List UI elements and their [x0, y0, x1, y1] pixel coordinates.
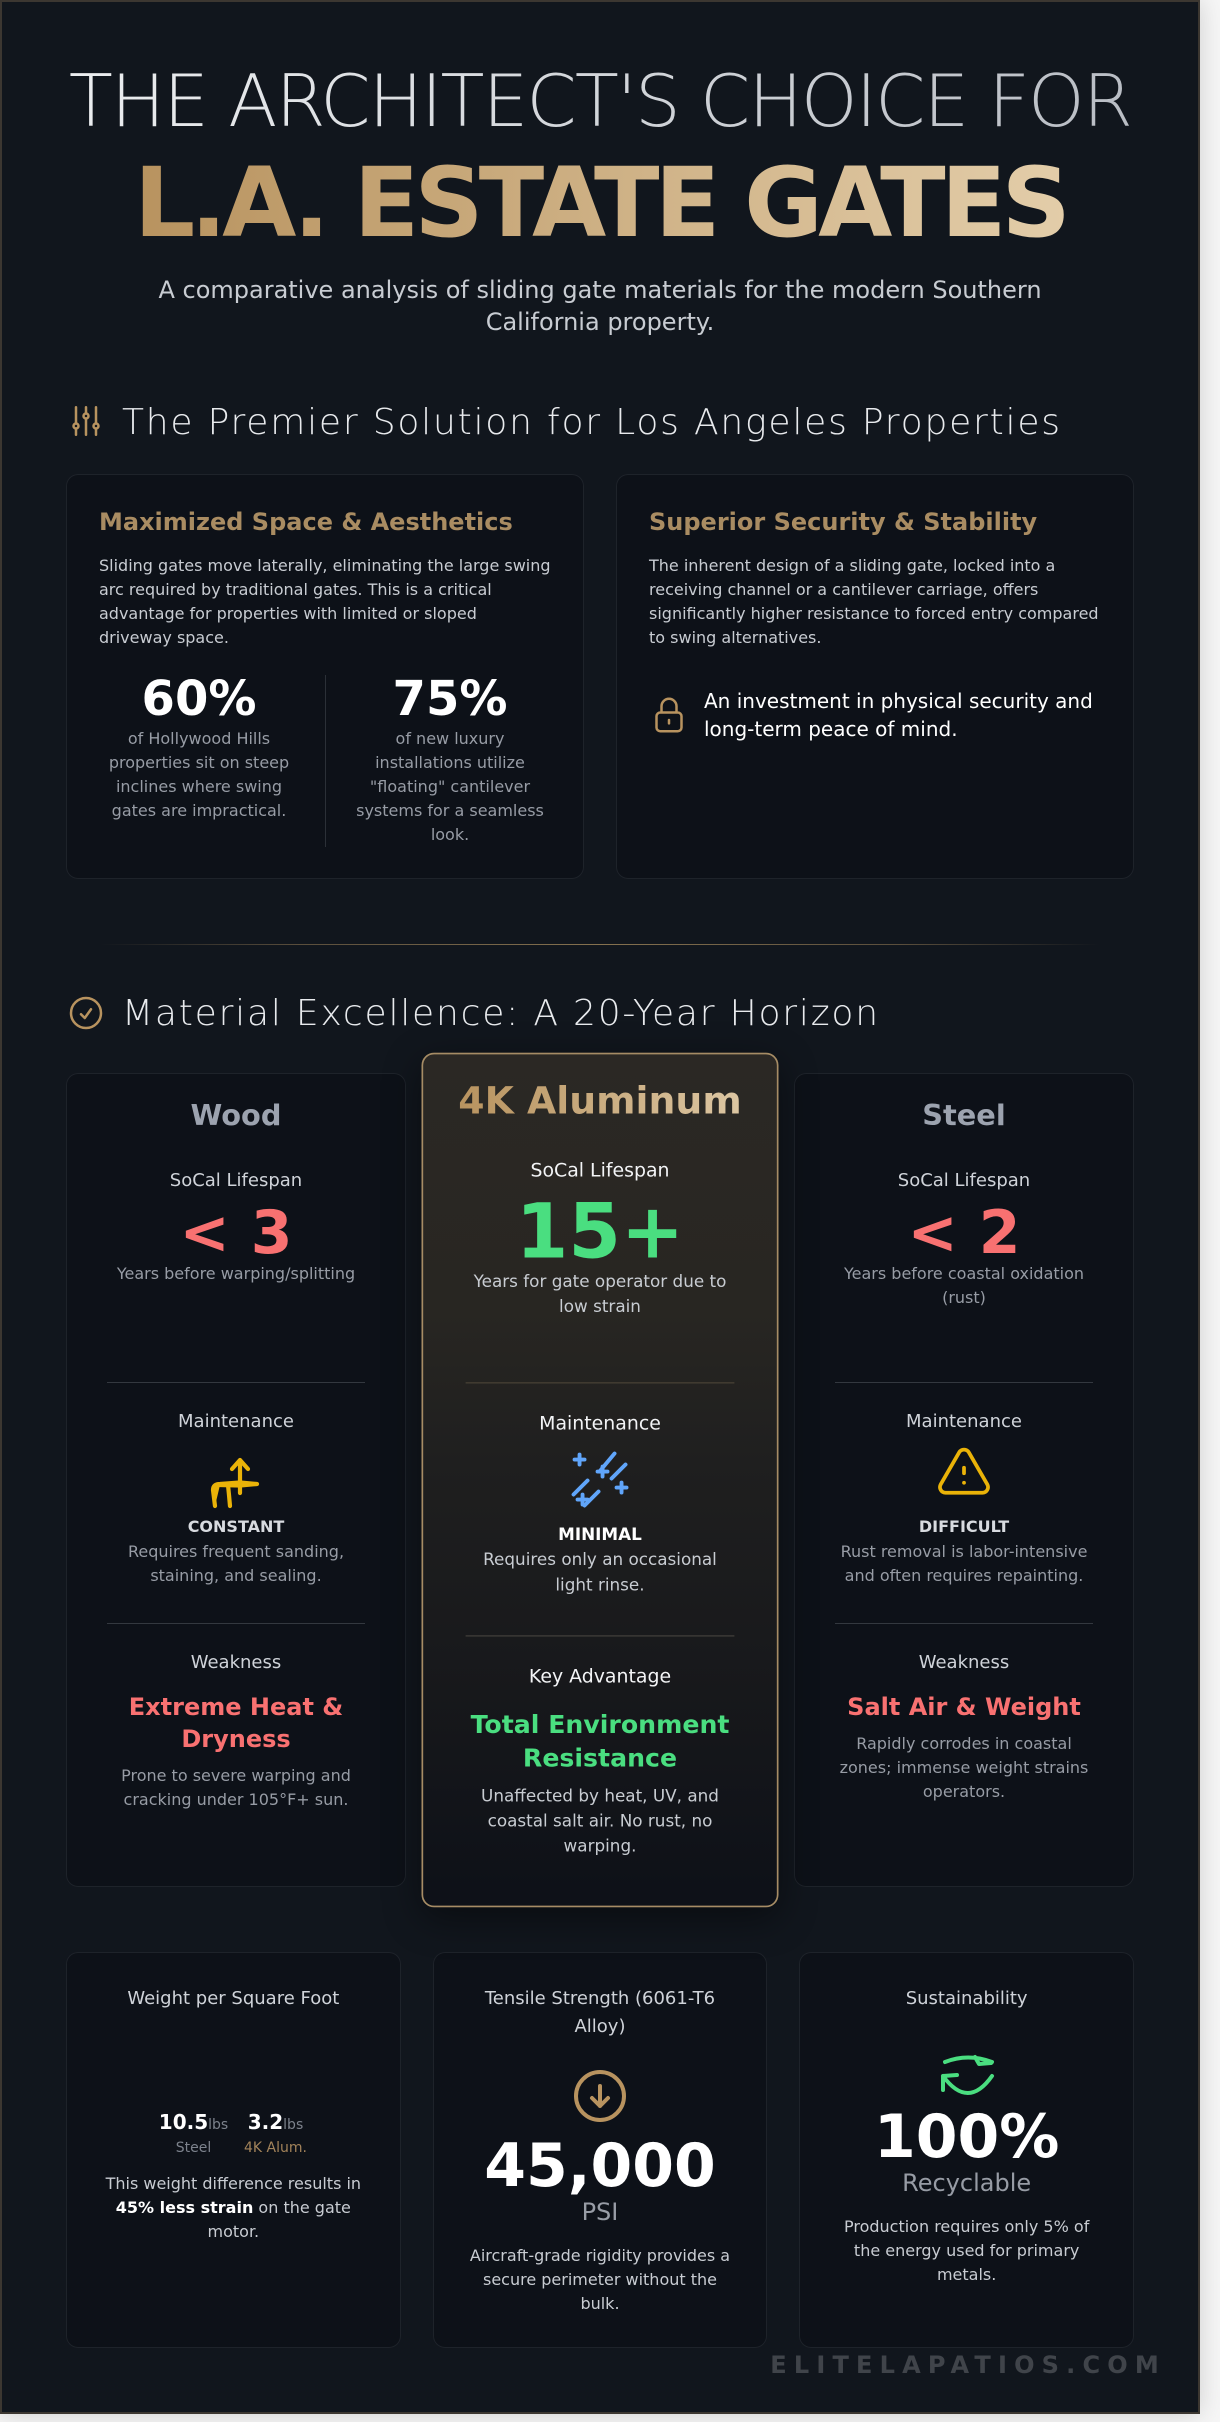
key advantage title	[470, 1710, 729, 1773]
subtitle	[158, 276, 1042, 336]
icon: arrow down circle	[574, 2070, 626, 2122]
metric note: motor.	[208, 2222, 259, 2241]
lifespan value: 15+	[516, 1187, 684, 1275]
card body text: driveway space.	[99, 628, 229, 647]
stat: 60%: 60%	[142, 670, 256, 726]
weakness title: Extreme Heat &	[129, 1693, 343, 1721]
weakness title	[129, 1693, 343, 1753]
material name: 4K Aluminum	[458, 1079, 742, 1122]
title: header line: THE ARCHITECT'S CHOICE FOR	[69, 59, 1131, 143]
weakness label: Weakness	[191, 1652, 281, 1673]
stat: 60%: of Hollywood Hills	[128, 728, 270, 748]
maintenance note	[128, 1542, 344, 1585]
icon: sparkle rinse	[572, 1452, 628, 1508]
card body text: advantage for properties with limited or sloped	[99, 604, 477, 623]
lifespan label: SoCal Lifespan	[170, 1170, 302, 1191]
comparison: steel: Steel	[176, 2140, 211, 2156]
heading: material excellence: Material Excellence: A 20-Year Horizon	[122, 992, 880, 1034]
maintenance status: DIFFICULT	[919, 1516, 1009, 1536]
maintenance note: Requires only an occasional	[483, 1549, 717, 1569]
weakness note	[121, 1766, 351, 1809]
metric label: Tensile Strength (6061-T6	[485, 1988, 715, 2008]
metric label	[484, 1988, 715, 2036]
callout: investment: long-term peace of mind.	[704, 716, 958, 740]
lifespan note: Years before warping/splitting	[117, 1264, 355, 1283]
metric label: Alloy)	[574, 2016, 625, 2036]
card body text	[648, 556, 1099, 647]
key advantage note: warping.	[564, 1836, 636, 1856]
panel: tensile strength	[433, 1952, 767, 2348]
panel: wood	[66, 1073, 406, 1887]
metric label: Sustainability	[906, 1988, 1028, 2008]
metric value: 45,000	[484, 2131, 716, 2201]
lifespan label: SoCal Lifespan	[530, 1160, 670, 1182]
card heading: Maximized Space & Aesthetics	[99, 508, 513, 536]
icon: sliders	[72, 406, 100, 436]
stat: 60%: gates are impractical.	[112, 800, 286, 820]
icon: warning triangle	[938, 1448, 990, 1495]
panel: sustainability	[799, 1952, 1134, 2348]
maintenance note: and often requires repainting.	[845, 1566, 1083, 1585]
watermark: ELITELAPATIOS.COM	[770, 2350, 1166, 2378]
material name: Wood	[191, 1098, 281, 1132]
metric note	[844, 2217, 1090, 2284]
icon: recycle	[940, 2054, 994, 2095]
lifespan note: low strain	[559, 1296, 641, 1316]
lifespan value: < 3	[180, 1198, 292, 1268]
stat: 75%: installations utilize	[375, 752, 525, 772]
key advantage note: Unaffected by heat, UV, and	[481, 1786, 719, 1806]
panel: 4K aluminum (featured)	[422, 1053, 778, 1907]
metric note: Production requires only 5% of	[844, 2217, 1089, 2236]
comparison: aluminum	[244, 2110, 307, 2156]
stat: 60%	[109, 670, 289, 820]
weakness label: Weakness	[919, 1652, 1009, 1673]
metric note: bulk.	[580, 2294, 620, 2313]
weakness note: Prone to severe warping and	[121, 1766, 351, 1785]
lifespan note: Years before coastal oxidation	[844, 1264, 1084, 1283]
lifespan note: (rust)	[942, 1288, 986, 1307]
weakness note: Rapidly corrodes in coastal	[856, 1734, 1072, 1752]
heading: premier solution: The Premier Solution for Los Angeles Properties	[122, 402, 1062, 442]
card body text: Sliding gates move laterally, eliminating the large swing	[99, 556, 551, 575]
metric note: 45% less strain on the gate	[116, 2198, 351, 2217]
comparison: steel: 10.5lbs	[159, 2110, 228, 2134]
card body text	[99, 556, 551, 647]
card body text: arc required by traditional gates. This is a critical	[99, 580, 492, 599]
weakness note: cracking under 105°F+ sun.	[124, 1790, 348, 1809]
panel: superior security	[616, 474, 1134, 879]
maintenance label: Maintenance	[178, 1411, 294, 1432]
weakness note: operators.	[923, 1782, 1005, 1800]
stat: 60%: properties sit on steep	[109, 752, 289, 772]
key advantage title: Total Environment	[471, 1710, 729, 1739]
comparison: steel	[159, 2110, 228, 2156]
metric note: metals.	[937, 2265, 996, 2284]
maintenance note: Requires frequent sanding,	[128, 1542, 344, 1561]
panel: maximized space	[66, 474, 584, 879]
card body text: receiving channel or a cantilever carriage, offers	[649, 580, 1038, 599]
maintenance note: Rust removal is labor-intensive	[841, 1542, 1087, 1561]
metric value: 100%	[874, 2102, 1059, 2172]
title: L.A. Estate Gates: L.A. ESTATE GATES	[134, 147, 1066, 259]
callout: investment: An investment in physical security and	[704, 688, 1093, 712]
stat: 75%: "floating" cantilever	[370, 776, 530, 796]
stat: 75%: 75%	[393, 670, 507, 726]
comparison: aluminum: 3.2lbs	[248, 2110, 303, 2134]
subtitle: California property.	[486, 308, 714, 336]
maintenance note: light rinse.	[555, 1574, 645, 1594]
weakness note	[840, 1734, 1088, 1800]
maintenance note	[483, 1549, 717, 1594]
subtitle: A comparative analysis of sliding gate materials for the modern Southern	[158, 276, 1042, 304]
maintenance status: MINIMAL	[558, 1524, 642, 1544]
card heading: Superior Security & Stability	[649, 508, 1037, 536]
metric unit: PSI	[582, 2198, 618, 2226]
metric note: the energy used for primary	[854, 2241, 1079, 2260]
icon: check circle	[70, 996, 102, 1030]
stat: 75%: look.	[431, 824, 469, 844]
metric note: secure perimeter without the	[483, 2270, 717, 2289]
stat: 75%: of new luxury	[396, 728, 504, 748]
metric label: Weight per Square Foot	[127, 1988, 339, 2008]
metric unit: Recyclable	[902, 2169, 1031, 2197]
lifespan note: Years for gate operator due to	[474, 1271, 726, 1290]
card body text: to swing alternatives.	[649, 628, 821, 647]
maintenance label: Maintenance	[906, 1411, 1022, 1432]
icon: wrench tool	[210, 1458, 260, 1508]
weakness title: Salt Air & Weight	[847, 1693, 1081, 1721]
stat: 60%: inclines where swing	[116, 776, 282, 796]
key advantage title: Resistance	[523, 1744, 677, 1773]
panel: steel	[794, 1073, 1134, 1887]
card body text: significantly higher resistance to forced entry compared	[649, 604, 1099, 623]
callout: investment	[704, 688, 1093, 740]
panel: weight	[66, 1952, 401, 2348]
key advantage note	[481, 1786, 719, 1856]
weakness note: zones; immense weight strains	[840, 1758, 1088, 1776]
key advantage note: coastal salt air. No rust, no	[488, 1811, 712, 1831]
maintenance status: CONSTANT	[188, 1516, 284, 1536]
key advantage label: Key Advantage	[529, 1666, 671, 1688]
lifespan label: SoCal Lifespan	[898, 1170, 1030, 1191]
stat: 75%: systems for a seamless	[356, 800, 544, 820]
icon: lock	[655, 698, 683, 732]
lifespan note	[474, 1271, 726, 1316]
stat: 75%	[356, 670, 544, 844]
weakness title: Dryness	[181, 1725, 291, 1753]
material name: Steel	[922, 1098, 1006, 1132]
maintenance note	[841, 1542, 1087, 1585]
lifespan note	[844, 1264, 1084, 1307]
maintenance note: staining, and sealing.	[150, 1566, 322, 1585]
card body text: The inherent design of a sliding gate, locked into a	[649, 556, 1055, 575]
comparison: aluminum: 4K Alum.	[244, 2140, 307, 2156]
lifespan value: < 2	[908, 1198, 1020, 1268]
metric note	[470, 2246, 730, 2313]
metric note: This weight difference results in	[106, 2174, 361, 2193]
maintenance label: Maintenance	[539, 1413, 661, 1435]
metric note	[106, 2174, 361, 2241]
metric note: Aircraft-grade rigidity provides a	[470, 2246, 730, 2265]
